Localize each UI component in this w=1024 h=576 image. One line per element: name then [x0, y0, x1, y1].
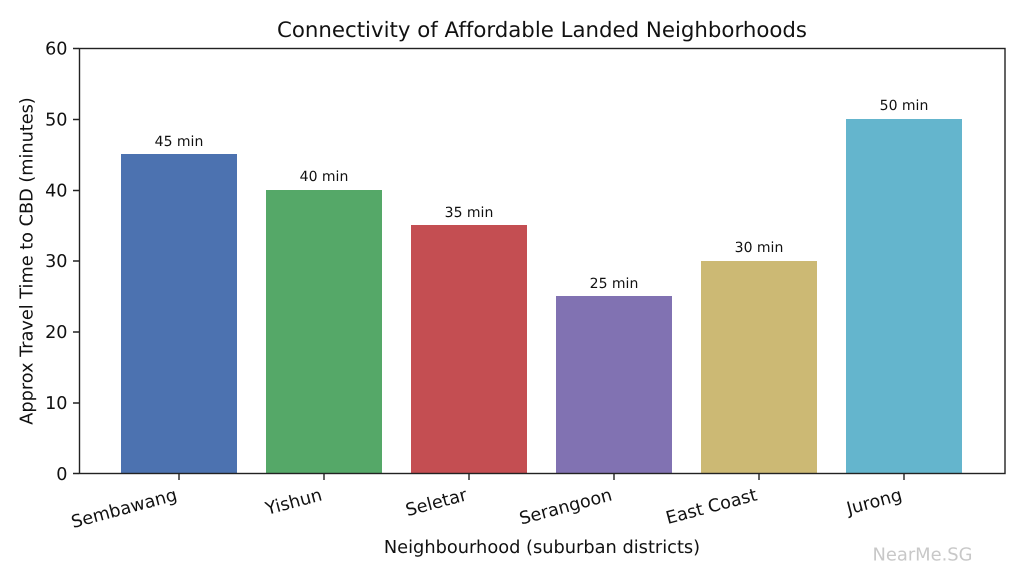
bar value labels: 35 min: [445, 205, 493, 221]
x axis ticks and labels: Sembawang: [69, 486, 179, 533]
bar: Sembawang: [121, 154, 237, 474]
bars: [121, 119, 962, 474]
y axis ticks and labels: 50: [45, 110, 68, 130]
x axis ticks and labels: Serangoon: [517, 486, 614, 529]
x axis ticks and labels: Yishun: [262, 486, 324, 520]
bar: Seletar: [411, 225, 527, 474]
y axis ticks and labels: 20: [45, 323, 68, 343]
bar value labels: 45 min: [155, 134, 203, 150]
y axis ticks and labels: 10: [45, 394, 68, 414]
y axis title: Approx Travel Time to CBD (minutes): [18, 97, 38, 425]
x axis ticks and labels: [69, 474, 904, 533]
plot frame: [80, 48, 1005, 474]
y axis ticks and labels: 30: [45, 252, 68, 272]
watermark: NearMe.SG: [872, 544, 973, 566]
bar value labels: 25 min: [590, 276, 638, 292]
bar value labels: 50 min: [880, 98, 928, 114]
bar: Yishun: [266, 190, 382, 474]
x axis title: Neighbourhood (suburban districts): [384, 537, 700, 558]
bar value labels: 30 min: [735, 240, 783, 256]
y axis ticks and labels: [45, 40, 79, 485]
bar value labels: [155, 98, 928, 292]
x axis ticks and labels: Seletar: [404, 485, 470, 521]
title: Connectivity of Affordable Landed Neighborhoods: [277, 18, 807, 43]
x axis ticks and labels: Jurong: [844, 486, 904, 520]
bar value labels: 40 min: [300, 169, 348, 185]
x axis ticks and labels: East Coast: [664, 485, 759, 529]
bar: East Coast: [701, 261, 817, 474]
y axis ticks and labels: 40: [45, 182, 68, 202]
bar: Jurong: [846, 119, 962, 474]
bar: Serangoon: [556, 296, 672, 474]
y axis ticks and labels: 60: [45, 40, 68, 60]
y axis ticks and labels: 0: [56, 465, 68, 485]
